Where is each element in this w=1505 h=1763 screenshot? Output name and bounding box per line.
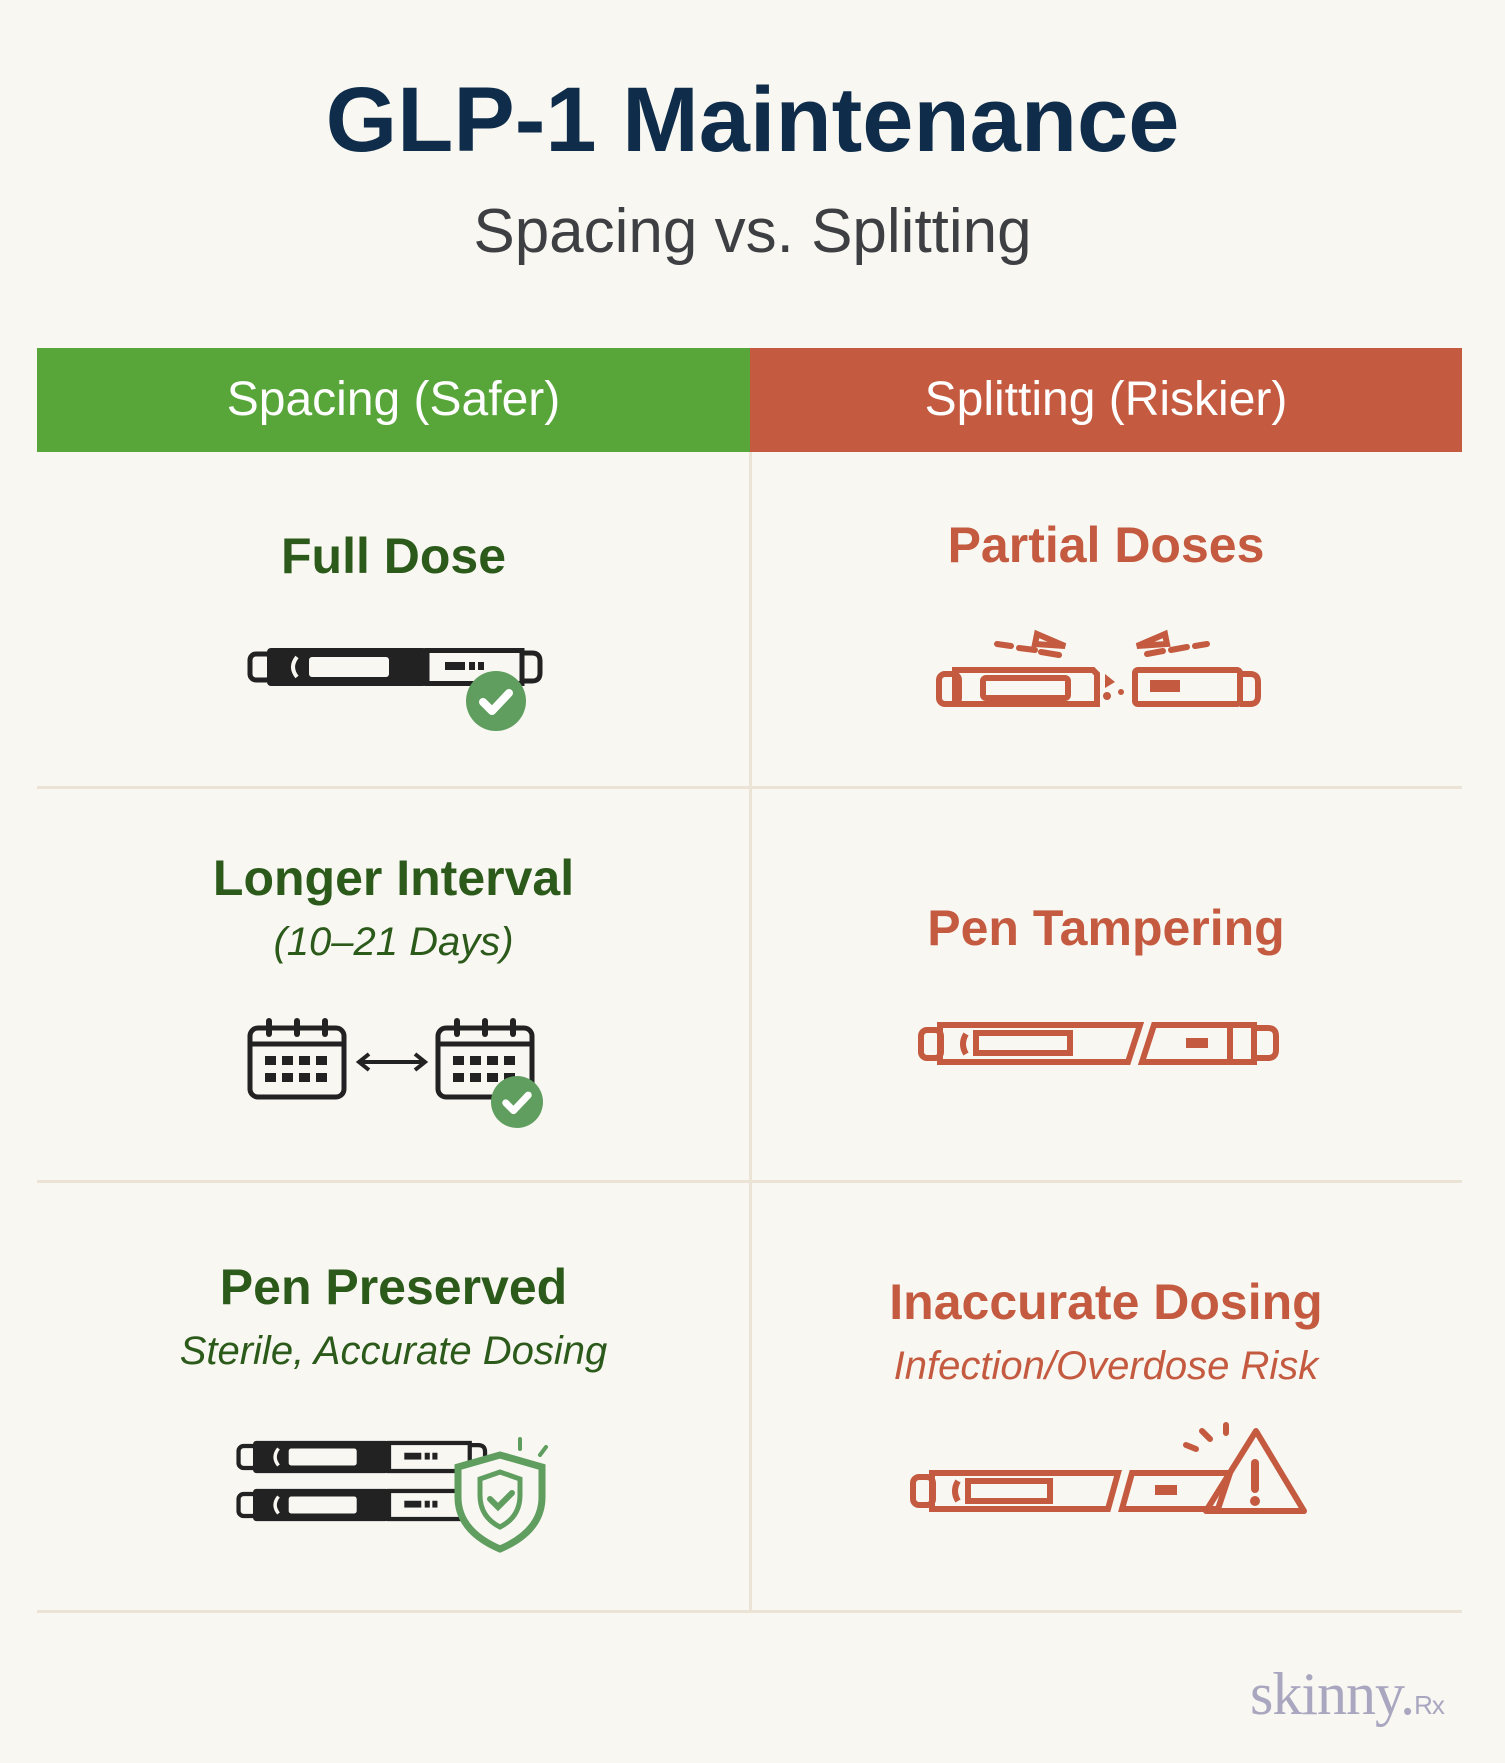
icon: split pen (936, 630, 1261, 707)
header: splitting (750, 348, 1462, 452)
subtitle: Spacing vs. Splitting (473, 197, 1032, 266)
icon: calendars (248, 1018, 543, 1128)
header: splitting: Splitting (Riskier) (925, 373, 1287, 426)
icon: pens with shield (236, 1437, 548, 1553)
text: (10–21 Days) (273, 920, 514, 964)
icon: broken pen (918, 1022, 1279, 1065)
panel: full dose: Full Dose (281, 528, 506, 584)
panel: inaccurate dosing: Inaccurate Dosing (889, 1274, 1323, 1330)
panel: pen preserved: Pen Preserved (220, 1259, 567, 1315)
title: GLP-1 Maintenance (326, 69, 1179, 171)
logo: skinny.Rx (1250, 1661, 1444, 1727)
text: Infection/Overdose Risk (894, 1344, 1318, 1388)
panel: longer interval: Longer Interval (213, 850, 574, 906)
text: Sterile, Accurate Dosing (180, 1329, 607, 1373)
icon: broken pen with warning (910, 1422, 1307, 1514)
panel: partial doses: Partial Doses (948, 517, 1264, 573)
header: spacing (37, 348, 750, 452)
icon: pen with check (248, 648, 542, 731)
panel: pen tampering: Pen Tampering (927, 900, 1285, 956)
header: spacing: Spacing (Safer) (227, 373, 560, 426)
